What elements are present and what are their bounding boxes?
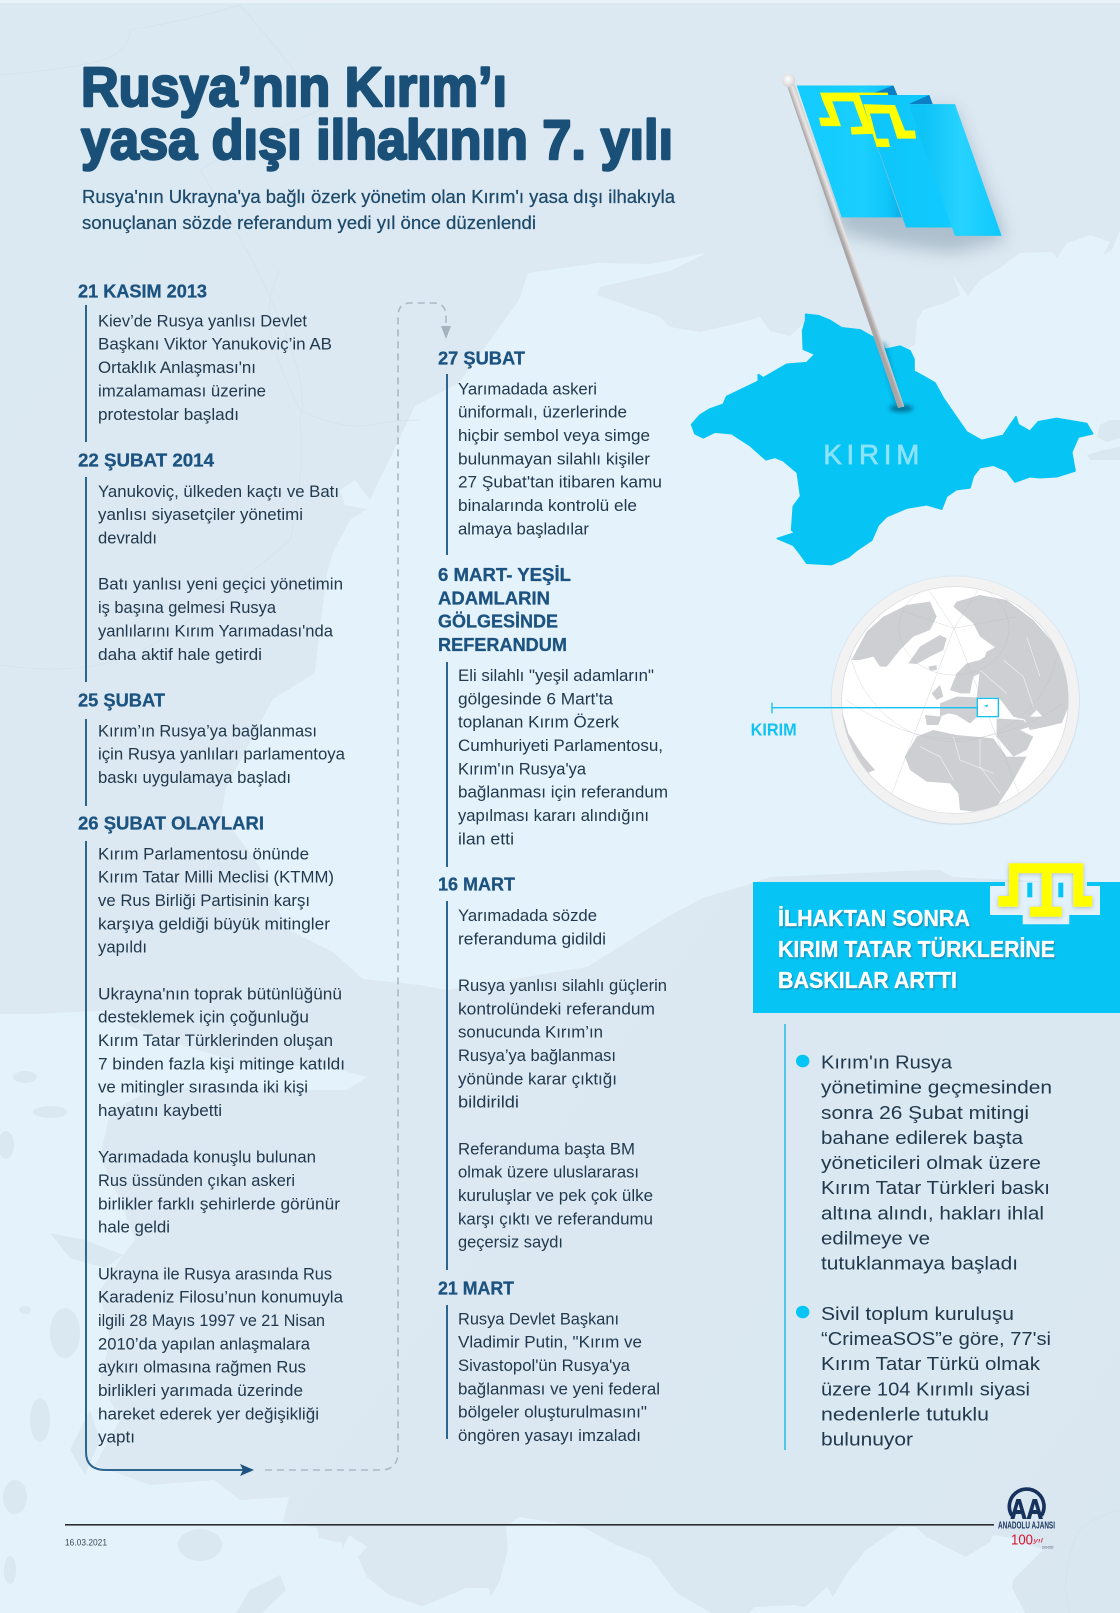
timeline event: 16 Mart [438,873,667,1270]
logo: Anadolu Ajansı [998,1489,1055,1550]
vertical bar [446,662,448,867]
bullet 2: Sivil toplum kuruluşu [821,1303,1014,1324]
bullet 1: edilmeye ve [821,1228,930,1248]
text block: kuruluşlar ve pek çok ülke [458,1186,653,1205]
vertical bar [85,719,87,806]
timeline event: 27 Şubat [438,347,662,555]
text block [458,1309,660,1445]
text block: Kiev’de Rusya yanlısı Devlet [98,311,307,330]
bullet 2 [796,1303,1051,1450]
logo: Anadolu Ajansı: ANADOLU AJANSI [998,1521,1055,1532]
bullet 1 [796,1052,1052,1274]
bullet 1: altına alındı, hakları ihlal [821,1202,1044,1223]
text block: Rusya’ya bağlanması [458,1046,616,1065]
text block: Cumhuriyeti Parlamentosu, [458,736,663,755]
text block: bildirildi [458,1093,519,1112]
text block: hiçbir sembol veya simge [458,426,650,445]
subtitle [82,186,676,233]
title [81,55,673,171]
bullet 1: yöneticileri olmak üzere [821,1152,1041,1173]
flag shadow [817,107,1007,253]
text block: Ortaklık Anlaşması'nı [98,358,256,377]
date: 16.03.2021 [65,1538,107,1548]
text block: sonucunda Kırım’ın [458,1023,603,1042]
text block: Ukrayna'nın toprak bütünlüğünü [98,984,342,1003]
panel: bullet list [784,1024,1052,1450]
text block: bağlanması için referandum [458,783,668,802]
text block: hayatını kaybetti [98,1101,222,1120]
text block [458,906,667,1252]
text block: geçersiz saydı [458,1233,563,1252]
flag [797,85,1002,236]
bullet 2: Kırım Tatar Türkü olmak [821,1353,1041,1374]
text block: yapılması kararı alındığını [458,806,649,825]
Crimea label: KIRIM [823,439,919,470]
heading: 6 MART- YEŞİL [438,564,571,585]
vertical bar [85,477,87,682]
text block: Yarımadada askeri [458,379,597,398]
text block: karşıya geldiği büyük mitingler [98,914,330,933]
text block: Başkanı Viktor Yanukoviç’in AB [98,335,332,354]
text block: Sivastopol'ün Rusya'ya [458,1356,631,1375]
text block: için Rusya yanlıları parlamentoya [98,745,346,764]
text block: olmak üzere uluslararası [458,1163,639,1182]
text block: Kırım’ın Rusya’ya bağlanması [98,721,317,740]
timeline event: 21 Kasım 2013 [78,280,332,442]
text block: birlikleri yarımada üzerinde [98,1381,303,1400]
text block: toplanan Kırım Özerk [458,713,619,732]
bullet 1: bahane edilerek başta [821,1127,1024,1148]
text block [98,721,346,787]
text block: yapıldı [98,938,147,957]
logo: Anadolu Ajansı: AA [1010,1494,1043,1525]
text block: desteklemek için çoğunluğu [98,1008,309,1027]
text block: Vladimir Putin, "Kırım ve [458,1333,642,1352]
text block: yanlısı siyasetçiler yönetimi [98,505,303,524]
text block: Karadeniz Filosu’nun konumuyla [98,1288,344,1307]
text block [98,311,332,424]
timeline event: 22 Şubat 2014 [78,449,343,682]
Crimea shape [692,314,1093,565]
text block [98,844,345,1447]
heading: 27 ŞUBAT [438,347,526,368]
timeline event: 25 Şubat [78,689,346,806]
text block: Batı yanlısı yeni geçici yönetimin [98,575,343,594]
text block: Yarımadada konuşlu bulunan [98,1148,316,1167]
text block: almaya başladılar [458,519,589,538]
text block: ilgili 28 Mayıs 1997 ve 21 Nisan [98,1311,325,1330]
heading: ADAMLARIN [438,587,550,608]
text block: Rus üssünden çıkan askeri [98,1171,295,1190]
vertical bar [85,305,87,442]
text block: üniformalı, üzerlerinde [458,403,627,422]
arrow: dashed connector to next column [265,303,451,1470]
bullet 1: tutuklanmaya başladı [821,1253,1018,1274]
text block: binalarında kontrolü ele [458,496,637,515]
vertical bar [446,1305,448,1439]
heading: 16 MART [438,873,516,894]
text block: Kırım'ın Rusya'ya [458,759,587,778]
title: Rusya’nın Kırım’ı [81,55,507,118]
text block: ilan etti [458,829,514,848]
text block: protestolar başladı [98,405,239,424]
heading: REFERANDUM [438,634,567,655]
heading: 22 ŞUBAT 2014 [78,449,215,470]
text block: Kırım Tatar Milli Meclisi (KTMM) [98,868,334,887]
bullet 2: bulunuyor [821,1429,913,1450]
bullet 2: üzere 104 Kırımlı siyasi [821,1378,1030,1399]
text block: Kırım Parlamentosu önünde [98,844,309,863]
headline: İLHAKTAN SONRA [778,905,970,931]
text block: yönünde karar çıktığı [458,1069,617,1088]
icon: Crimean Tatar tamga [990,863,1100,924]
text block: yanlılarını Kırım Yarımadası'nda [98,622,334,641]
text block: baskı uygulamaya başladı [98,768,291,787]
text block: Referanduma başta BM [458,1139,635,1158]
Crimea locator box and leader [772,698,998,717]
text block: hale geldi [98,1218,170,1237]
text block [98,482,343,664]
headline [778,905,1055,993]
timeline event: 6 Mart [438,564,668,867]
text block: Yarımadada sözde [458,906,597,925]
text block: referanduma gidildi [458,929,606,948]
text block: bağlanması ve yeni federal [458,1379,660,1398]
logo: Anadolu Ajansı: 1920-2020 [1042,1546,1053,1550]
text block: daha aktif hale getirdi [98,645,262,664]
text block: imzalamaması üzerine [98,382,266,401]
map: Crimea with flag [692,74,1093,565]
heading: 25 ŞUBAT [78,689,166,710]
vertical bar [446,901,448,1270]
logo: Anadolu Ajansı: 100 [1011,1533,1033,1549]
text block: gölgesinde 6 Mart'ta [458,689,614,708]
text block: Eli silahlı "yeşil adamların" [458,666,654,685]
heading: 21 KASIM 2013 [78,280,207,301]
text block: karşı çıktı ve referandumu [458,1209,653,1228]
text block: 2010’da yapılan anlaşmalara [98,1334,311,1353]
bullet 1: Kırım'ın Rusya [821,1052,953,1072]
vertical bar [446,374,448,555]
text block: devraldı [98,528,157,547]
heading: GÖLGESİNDE [438,611,558,632]
bullet 2: nedenlerle tutuklu [821,1403,989,1424]
bullet 1: sonra 26 Şubat mitingi [821,1102,1029,1123]
text block: yaptı [98,1428,135,1447]
panel: headline box [753,863,1120,1013]
bullet 2: “CrimeaSOS”e göre, 77'si [821,1328,1051,1349]
text block: iş başına gelmesi Rusya [98,598,277,617]
logo: Anadolu Ajansı: yıl [1032,1538,1043,1545]
text block: 7 binden fazla kişi mitinge katıldı [98,1054,345,1073]
text block: 27 Şubat'tan itibaren kamu [458,473,662,492]
locator globe [752,576,1080,825]
heading [438,564,571,655]
locator label: KIRIM [751,720,797,740]
timeline event: 21 Mart [438,1277,660,1445]
heading: 26 ŞUBAT OLAYLARI [78,812,264,833]
timeline event: 26 Şubat olayları [78,812,345,1447]
bullet 1: yönetimine geçmesinden [821,1077,1052,1098]
text block: Yanukoviç, ülkeden kaçtı ve Batı [98,482,339,501]
text block: Rusya Devlet Başkanı [458,1309,619,1328]
text block: Kırım Tatar Türklerinden oluşan [98,1031,333,1050]
heading: 21 MART [438,1277,515,1298]
text block: bulunmayan silahlı kişiler [458,449,650,468]
title: yasa dışı ilhakının 7. yılı [81,108,673,171]
text block [458,379,662,538]
subtitle: Rusya'nın Ukrayna'ya bağlı özerk yönetim olan Kırım'ı yasa dışı ilhakıyla [82,186,676,207]
text block: Rusya yanlısı silahlı güçlerin [458,976,667,995]
headline: BASKILAR ARTTI [778,967,957,993]
flag pole [782,74,913,412]
text block: ve Rus Birliği Partisinin karşı [98,891,310,910]
subtitle: sonuçlanan sözde referandum yedi yıl önce düzenlendi [82,212,536,233]
headline: KIRIM TATAR TÜRKLERİNE [778,936,1055,962]
bullet 1: Kırım Tatar Türkleri baskı [821,1177,1050,1198]
footer rule [65,1524,994,1526]
text block: birlikler farklı şehirlerde görünür [98,1194,340,1213]
arrow: solid timeline connector [86,841,254,1476]
text block: ve mitingler sırasında iki kişi [98,1078,308,1097]
text block: hareket ederek yer değişikliği [98,1404,319,1423]
text block: Ukrayna ile Rusya arasında Rus [98,1264,332,1283]
text block: bölgeler oluşturulmasını" [458,1403,647,1422]
text block [458,666,668,848]
text block: öngören yasayı imzaladı [458,1426,641,1445]
text block: kontrolündeki referandum [458,999,655,1018]
text block: aykırı olmasına rağmen Rus [98,1358,306,1377]
